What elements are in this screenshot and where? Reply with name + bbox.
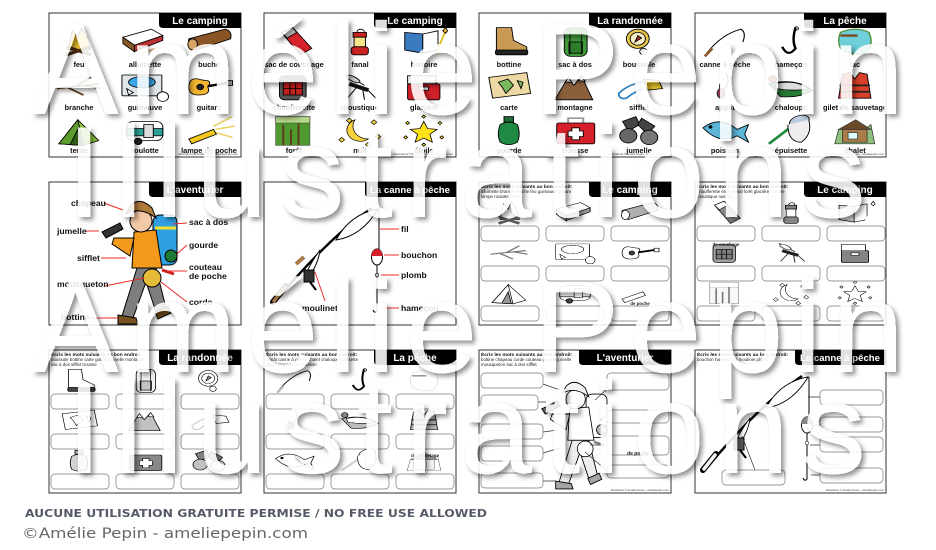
watermark: Illustrations — [66, 355, 866, 501]
item: sifflet: sifflet — [629, 103, 649, 112]
poster: La canne à pêche diagram — [264, 182, 456, 325]
item: étoile: étoile — [414, 146, 434, 155]
item: canne à pêche: canne à pêche — [700, 60, 750, 69]
item: carte — [489, 73, 531, 112]
poster: L'aventurier diagram — [49, 182, 241, 325]
illustration: fishing rod — [273, 208, 382, 312]
hint: de poche — [630, 301, 650, 306]
answer boxes — [697, 226, 885, 321]
item: chalet — [835, 120, 875, 155]
poster: La randonnée vocabulary — [479, 13, 671, 157]
item: roulotte — [127, 121, 163, 155]
item: branche: branche — [65, 103, 93, 112]
callout lines — [315, 229, 399, 308]
item: poisson — [703, 122, 748, 155]
item: appât: appât — [715, 103, 735, 112]
instructions — [697, 182, 789, 199]
header tab — [374, 13, 456, 28]
callout labels: sifflet — [77, 253, 100, 263]
header tab — [589, 13, 671, 28]
leader lines — [742, 397, 820, 475]
item: trousse: trousse — [562, 146, 588, 155]
credit: Illustrations © Amélie Pepin - ameliepepin.com — [824, 152, 885, 156]
header tab: L'aventurier — [167, 185, 224, 196]
callout labels — [302, 224, 439, 313]
instructions: gilet hameçon lac poisson — [266, 362, 317, 367]
hint: de poche — [627, 451, 649, 457]
callout labels: moulinet — [302, 303, 338, 313]
callout labels: mousqueton — [57, 279, 109, 289]
callout labels: bottine — [61, 312, 90, 322]
header tab — [804, 182, 886, 197]
item: moustique — [341, 74, 379, 112]
illustration: rod outline — [703, 376, 812, 480]
header tab: L'aventurier — [597, 353, 654, 364]
header tab — [159, 13, 241, 28]
callout labels: plomb — [401, 270, 427, 280]
item: trousse — [557, 118, 595, 155]
leader lines — [538, 384, 606, 481]
icons — [276, 369, 441, 471]
poster: Le camping vocabulary 1 — [49, 13, 241, 157]
answer boxes — [481, 373, 669, 488]
item: fanal: fanal — [351, 60, 369, 69]
callout lines — [86, 203, 187, 318]
instructions: lampe roulotte tente — [481, 194, 520, 199]
item: feu: feu — [73, 60, 85, 69]
item: épuisette: épuisette — [775, 146, 807, 155]
item: chaufferette: chaufferette — [273, 103, 315, 112]
item: histoire — [405, 28, 448, 69]
worksheet: La pêche — [264, 350, 456, 493]
hint: de sauvetage — [411, 453, 439, 458]
instructions: bouchon hameçon fil moulinet plomb — [697, 357, 769, 362]
item: histoire: histoire — [411, 60, 437, 69]
header tab: Le camping — [172, 16, 228, 27]
item: chalet: chalet — [844, 146, 866, 155]
item: chaufferette — [273, 76, 315, 112]
header tab: La pêche — [823, 16, 867, 27]
item: canne à pêche — [700, 29, 750, 69]
icons — [491, 201, 661, 304]
poster: Le camping vocabulary 2 — [264, 13, 456, 157]
instructions: Écris les mots suivants au bon endroit: — [481, 182, 573, 190]
illustration: adventurer outline — [542, 382, 607, 489]
item: montagne: montagne — [557, 103, 593, 112]
instructions: appât canne à pêche chalet chaloupe épuisette — [266, 357, 359, 362]
item: buche — [188, 29, 231, 69]
item: forêt: forêt — [286, 146, 303, 155]
item: glacière: glacière — [410, 103, 438, 112]
item: boussole — [623, 29, 655, 69]
item: lampe de poche: lampe de poche — [181, 146, 237, 155]
watermark: Amélie Pepin — [32, 254, 904, 400]
worksheet: L'aventurier — [479, 350, 671, 493]
item: gilet de sauvetage: gilet de sauvetage — [823, 103, 887, 112]
callout labels: corde — [189, 297, 213, 307]
item: tente — [59, 120, 99, 155]
watermark: Amélie Pepin — [32, 0, 904, 142]
header tab — [795, 350, 886, 365]
instructions: Écris les mots suivants au bon endroit: — [266, 350, 358, 358]
item: poisson: poisson — [711, 146, 740, 155]
instructions: moustique nuit sac — [697, 194, 734, 199]
callout labels: sac à dos — [189, 217, 228, 227]
header tab — [159, 350, 241, 365]
callout labels: couteau — [189, 262, 222, 272]
credit: Illustrations © Amélie Pepin - ameliepepin.com — [608, 152, 669, 156]
footer notice: AUCUNE UTILISATION GRATUITE PERMISE / NO FREE USE ALLOWED — [25, 508, 487, 520]
worksheet: Le camping 2 — [695, 182, 886, 325]
item: bottine: bottine — [497, 60, 521, 69]
item: jumelle: jumelle — [625, 146, 652, 155]
item: sac à dos: sac à dos — [558, 60, 592, 69]
credit: Illustrations © Amélie Pepin - ameliepepin.com — [393, 152, 454, 156]
credit: Illustration © Amélie Pepin - ameliepepin.com — [826, 488, 885, 492]
footer copyright: ©Amélie Pepin - ameliepepin.com — [22, 526, 308, 542]
worksheet: La canne à pêche — [695, 350, 886, 493]
item: buche: buche — [198, 60, 220, 69]
item: étoile — [404, 115, 444, 155]
instructions — [266, 350, 359, 367]
item: hameçon — [775, 27, 808, 69]
item: épuisette — [769, 113, 812, 155]
item: tente: tente — [70, 146, 88, 155]
header tab — [374, 350, 456, 365]
icons — [710, 201, 875, 305]
instructions — [481, 350, 573, 367]
item: branche — [57, 77, 101, 112]
header tab: La pêche — [393, 353, 437, 364]
callout labels: bouchon — [401, 250, 437, 260]
answer boxes — [51, 394, 239, 489]
item: allumette — [123, 29, 163, 69]
instructions — [697, 350, 789, 362]
instructions: Écris les mots suivants au bon endroit: — [51, 350, 143, 358]
callout labels: jumelle — [56, 226, 87, 236]
worksheet: La randonnée — [49, 350, 241, 493]
item: gilet de sauvetage — [823, 73, 887, 112]
header tab: La canne à pêche — [370, 185, 450, 196]
hint: de couchage — [713, 242, 740, 247]
callout labels: hameçon — [401, 303, 439, 313]
item: guimauve — [122, 75, 168, 112]
poster: La pêche vocabulary — [695, 13, 887, 157]
item: hameçon: hameçon — [775, 60, 808, 69]
item: lac — [839, 29, 871, 69]
item: roulotte: roulotte — [131, 146, 159, 155]
instructions: boussole bottine carte gourde jumelle montagne — [51, 357, 145, 362]
answer boxes — [266, 394, 454, 489]
item: moustique: moustique — [341, 103, 379, 112]
item: sifflet — [619, 79, 662, 112]
item: feu — [66, 28, 91, 69]
instructions: Écris les mots suivants au bon endroit: — [697, 350, 789, 358]
instructions — [481, 182, 573, 199]
header tab — [804, 13, 886, 28]
item: allumette: allumette — [129, 60, 161, 69]
header tab — [589, 182, 671, 197]
item: guitare — [189, 79, 232, 112]
instructions: Écris les mots suivants au bon endroit: — [481, 350, 573, 358]
item: gourde: gourde — [496, 146, 522, 155]
answer boxes — [722, 390, 883, 485]
item: sac à dos — [558, 28, 592, 69]
header tab — [365, 182, 456, 197]
callout labels: chapeau — [71, 198, 106, 208]
icons — [62, 369, 229, 471]
item: sac de couchage: sac de couchage — [264, 60, 324, 69]
item: sac de couchage — [264, 28, 324, 69]
callout labels: de poche — [189, 271, 227, 281]
callout labels — [56, 198, 228, 322]
header tab: Le camping — [817, 185, 873, 196]
item: appât — [715, 73, 735, 112]
header tab: La randonnée — [167, 353, 233, 364]
instructions — [51, 350, 145, 367]
header tab — [149, 182, 241, 197]
item: fanal — [351, 29, 369, 69]
worksheet: Le camping 1 — [479, 182, 671, 325]
instructions: Écris les mots suivants au bon endroit: — [697, 182, 789, 190]
answer boxes — [481, 226, 669, 321]
instructions: mousqueton sac à dos sifflet — [481, 362, 537, 367]
item: nuit — [339, 118, 381, 155]
item: nuit: nuit — [353, 146, 367, 155]
item: montagne — [555, 76, 593, 112]
credit: Illustration © Amélie Pepin - ameliepepin.com — [611, 488, 670, 492]
credit: Illustrations © Amélie Pepin - ameliepepin.com — [178, 152, 239, 156]
callout labels: fil — [401, 224, 409, 234]
item: glacière — [408, 76, 440, 112]
item: boussole: boussole — [623, 60, 655, 69]
item: guitare: guitare — [197, 103, 221, 112]
item: bottine — [495, 28, 528, 69]
header tab: Le camping — [602, 185, 658, 196]
watermark: Illustrations — [66, 99, 866, 245]
item: jumelle — [620, 117, 658, 155]
item: gourde — [496, 117, 522, 155]
item: lampe de poche — [181, 117, 237, 155]
item: lac: lac — [850, 60, 860, 69]
header tab: La canne à pêche — [800, 353, 880, 364]
item: guimauve: guimauve — [128, 103, 162, 112]
item: forêt — [276, 117, 310, 155]
item: carte: carte — [500, 103, 518, 112]
callout labels: gourde — [189, 240, 218, 250]
header tab — [579, 350, 671, 365]
illustration: adventurer — [102, 201, 177, 324]
item: chaloupe — [769, 76, 813, 112]
header tab: La randonnée — [597, 16, 663, 27]
instructions: chaufferette étoile fanal forêt glacière histoire — [697, 189, 785, 194]
instructions: allumette branche buche feu guimauve guitare — [481, 189, 572, 194]
instructions: sac à dos sifflet trousse — [51, 362, 97, 367]
header tab: Le camping — [387, 16, 443, 27]
instructions: bottine chapeau corde couteau gourde jumelle — [481, 357, 572, 362]
item: chaloupe: chaloupe — [775, 103, 807, 112]
